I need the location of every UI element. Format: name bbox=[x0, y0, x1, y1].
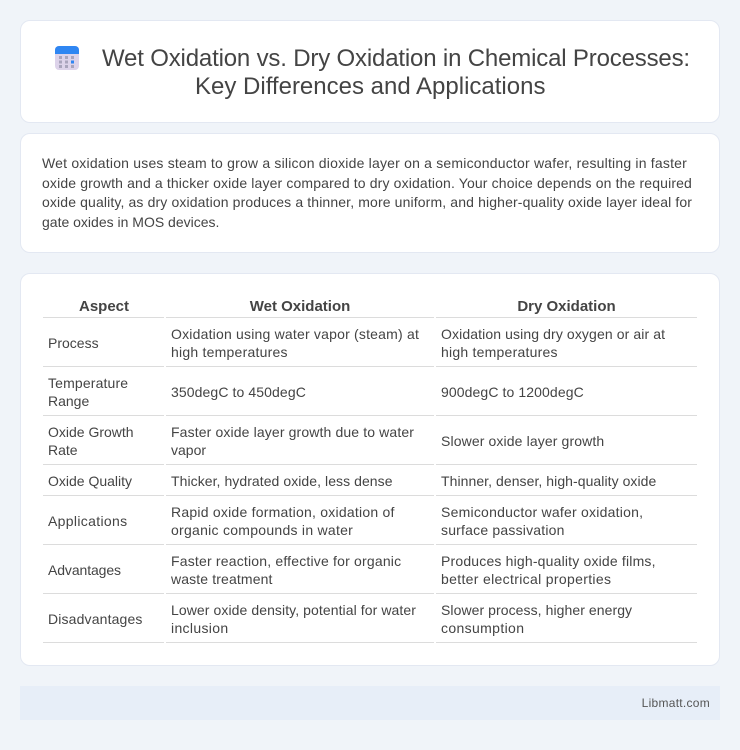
row: Applications: surface passivation bbox=[441, 522, 565, 538]
row: Applications bbox=[48, 504, 643, 538]
row: Disadvantages: Slower process, higher energy bbox=[441, 602, 632, 618]
row: Disadvantages bbox=[48, 602, 632, 636]
row: Oxide Quality: Oxide Quality bbox=[48, 473, 132, 489]
row: Oxide Growth Rate bbox=[48, 424, 604, 458]
title: Wet Oxidation vs. Dry Oxidation in Chemical Processes: bbox=[102, 45, 690, 72]
row: Advantages: Faster reaction, effective for organic bbox=[171, 553, 401, 569]
row: Oxide Growth Rate: Slower oxide layer growth bbox=[441, 433, 604, 449]
row: Disadvantages: Lower oxide density, potential for water bbox=[171, 602, 416, 618]
row: Process: Oxidation using water vapor (steam) at bbox=[171, 326, 419, 342]
row: Temperature Range: 350degC to 450degC bbox=[171, 384, 306, 400]
row: Oxide Quality bbox=[48, 473, 656, 489]
row: Applications: Applications bbox=[48, 513, 127, 529]
title: Key Differences and Applications bbox=[195, 73, 545, 100]
row: Advantages: Advantages bbox=[48, 562, 121, 578]
row: Advantages bbox=[48, 553, 656, 587]
row: Oxide Quality: Thinner, denser, high-quality oxide bbox=[441, 473, 656, 489]
intro text bbox=[42, 155, 692, 230]
row: Oxide Quality: Thicker, hydrated oxide, less dense bbox=[171, 473, 393, 489]
icon: calendar bbox=[55, 46, 79, 70]
row: Process: high temperatures bbox=[171, 344, 288, 360]
row: Applications: Rapid oxide formation, oxidation of bbox=[171, 504, 395, 520]
title bbox=[102, 45, 690, 100]
row: Temperature Range: Range bbox=[48, 393, 89, 409]
row: Oxide Growth Rate: Faster oxide layer growth due to water bbox=[171, 424, 414, 440]
footer bar bbox=[20, 686, 720, 720]
row: Advantages: waste treatment bbox=[171, 571, 273, 587]
table header: Dry Oxidation: Dry Oxidation bbox=[517, 298, 616, 315]
row: Advantages: better electrical properties bbox=[441, 571, 611, 587]
row: Process bbox=[48, 326, 665, 360]
footer credit: Libmatt.com bbox=[642, 696, 710, 710]
row: Process: Process bbox=[48, 335, 99, 351]
intro text: oxide quality, as dry oxidation produces a thinner, more uniform, and higher-quality oxide layer ideal for bbox=[42, 194, 692, 210]
row: Advantages: Produces high-quality oxide films, bbox=[441, 553, 656, 569]
row: Disadvantages: Disadvantages bbox=[48, 611, 143, 627]
row: Applications: Semiconductor wafer oxidation, bbox=[441, 504, 643, 520]
table panel bbox=[20, 273, 720, 666]
row: Oxide Growth Rate: Oxide Growth bbox=[48, 424, 134, 440]
table header: Wet Oxidation: Wet Oxidation bbox=[250, 298, 350, 315]
row: Applications: organic compounds in water bbox=[171, 522, 353, 538]
intro panel bbox=[20, 133, 720, 253]
row: Disadvantages: consumption bbox=[441, 620, 524, 636]
row: Process: Oxidation using dry oxygen or air at bbox=[441, 326, 665, 342]
intro text: gate oxides in MOS devices. bbox=[42, 214, 219, 230]
row: Temperature Range: 900degC to 1200degC bbox=[441, 384, 584, 400]
row: Disadvantages: inclusion bbox=[171, 620, 228, 636]
row: Oxide Growth Rate: Rate bbox=[48, 442, 78, 458]
row: Temperature Range: Temperature bbox=[48, 375, 128, 391]
row: Temperature Range bbox=[48, 375, 584, 409]
header panel bbox=[20, 20, 720, 123]
intro text: Wet oxidation uses steam to grow a silicon dioxide layer on a semiconductor wafer, resulting in faster bbox=[42, 155, 687, 171]
row: Oxide Growth Rate: vapor bbox=[171, 442, 206, 458]
intro text: oxide growth and a thicker oxide layer compared to dry oxidation. Your choice depends on the required bbox=[42, 175, 692, 191]
table header: Aspect: Aspect bbox=[79, 298, 129, 315]
row: Process: high temperatures bbox=[441, 344, 558, 360]
